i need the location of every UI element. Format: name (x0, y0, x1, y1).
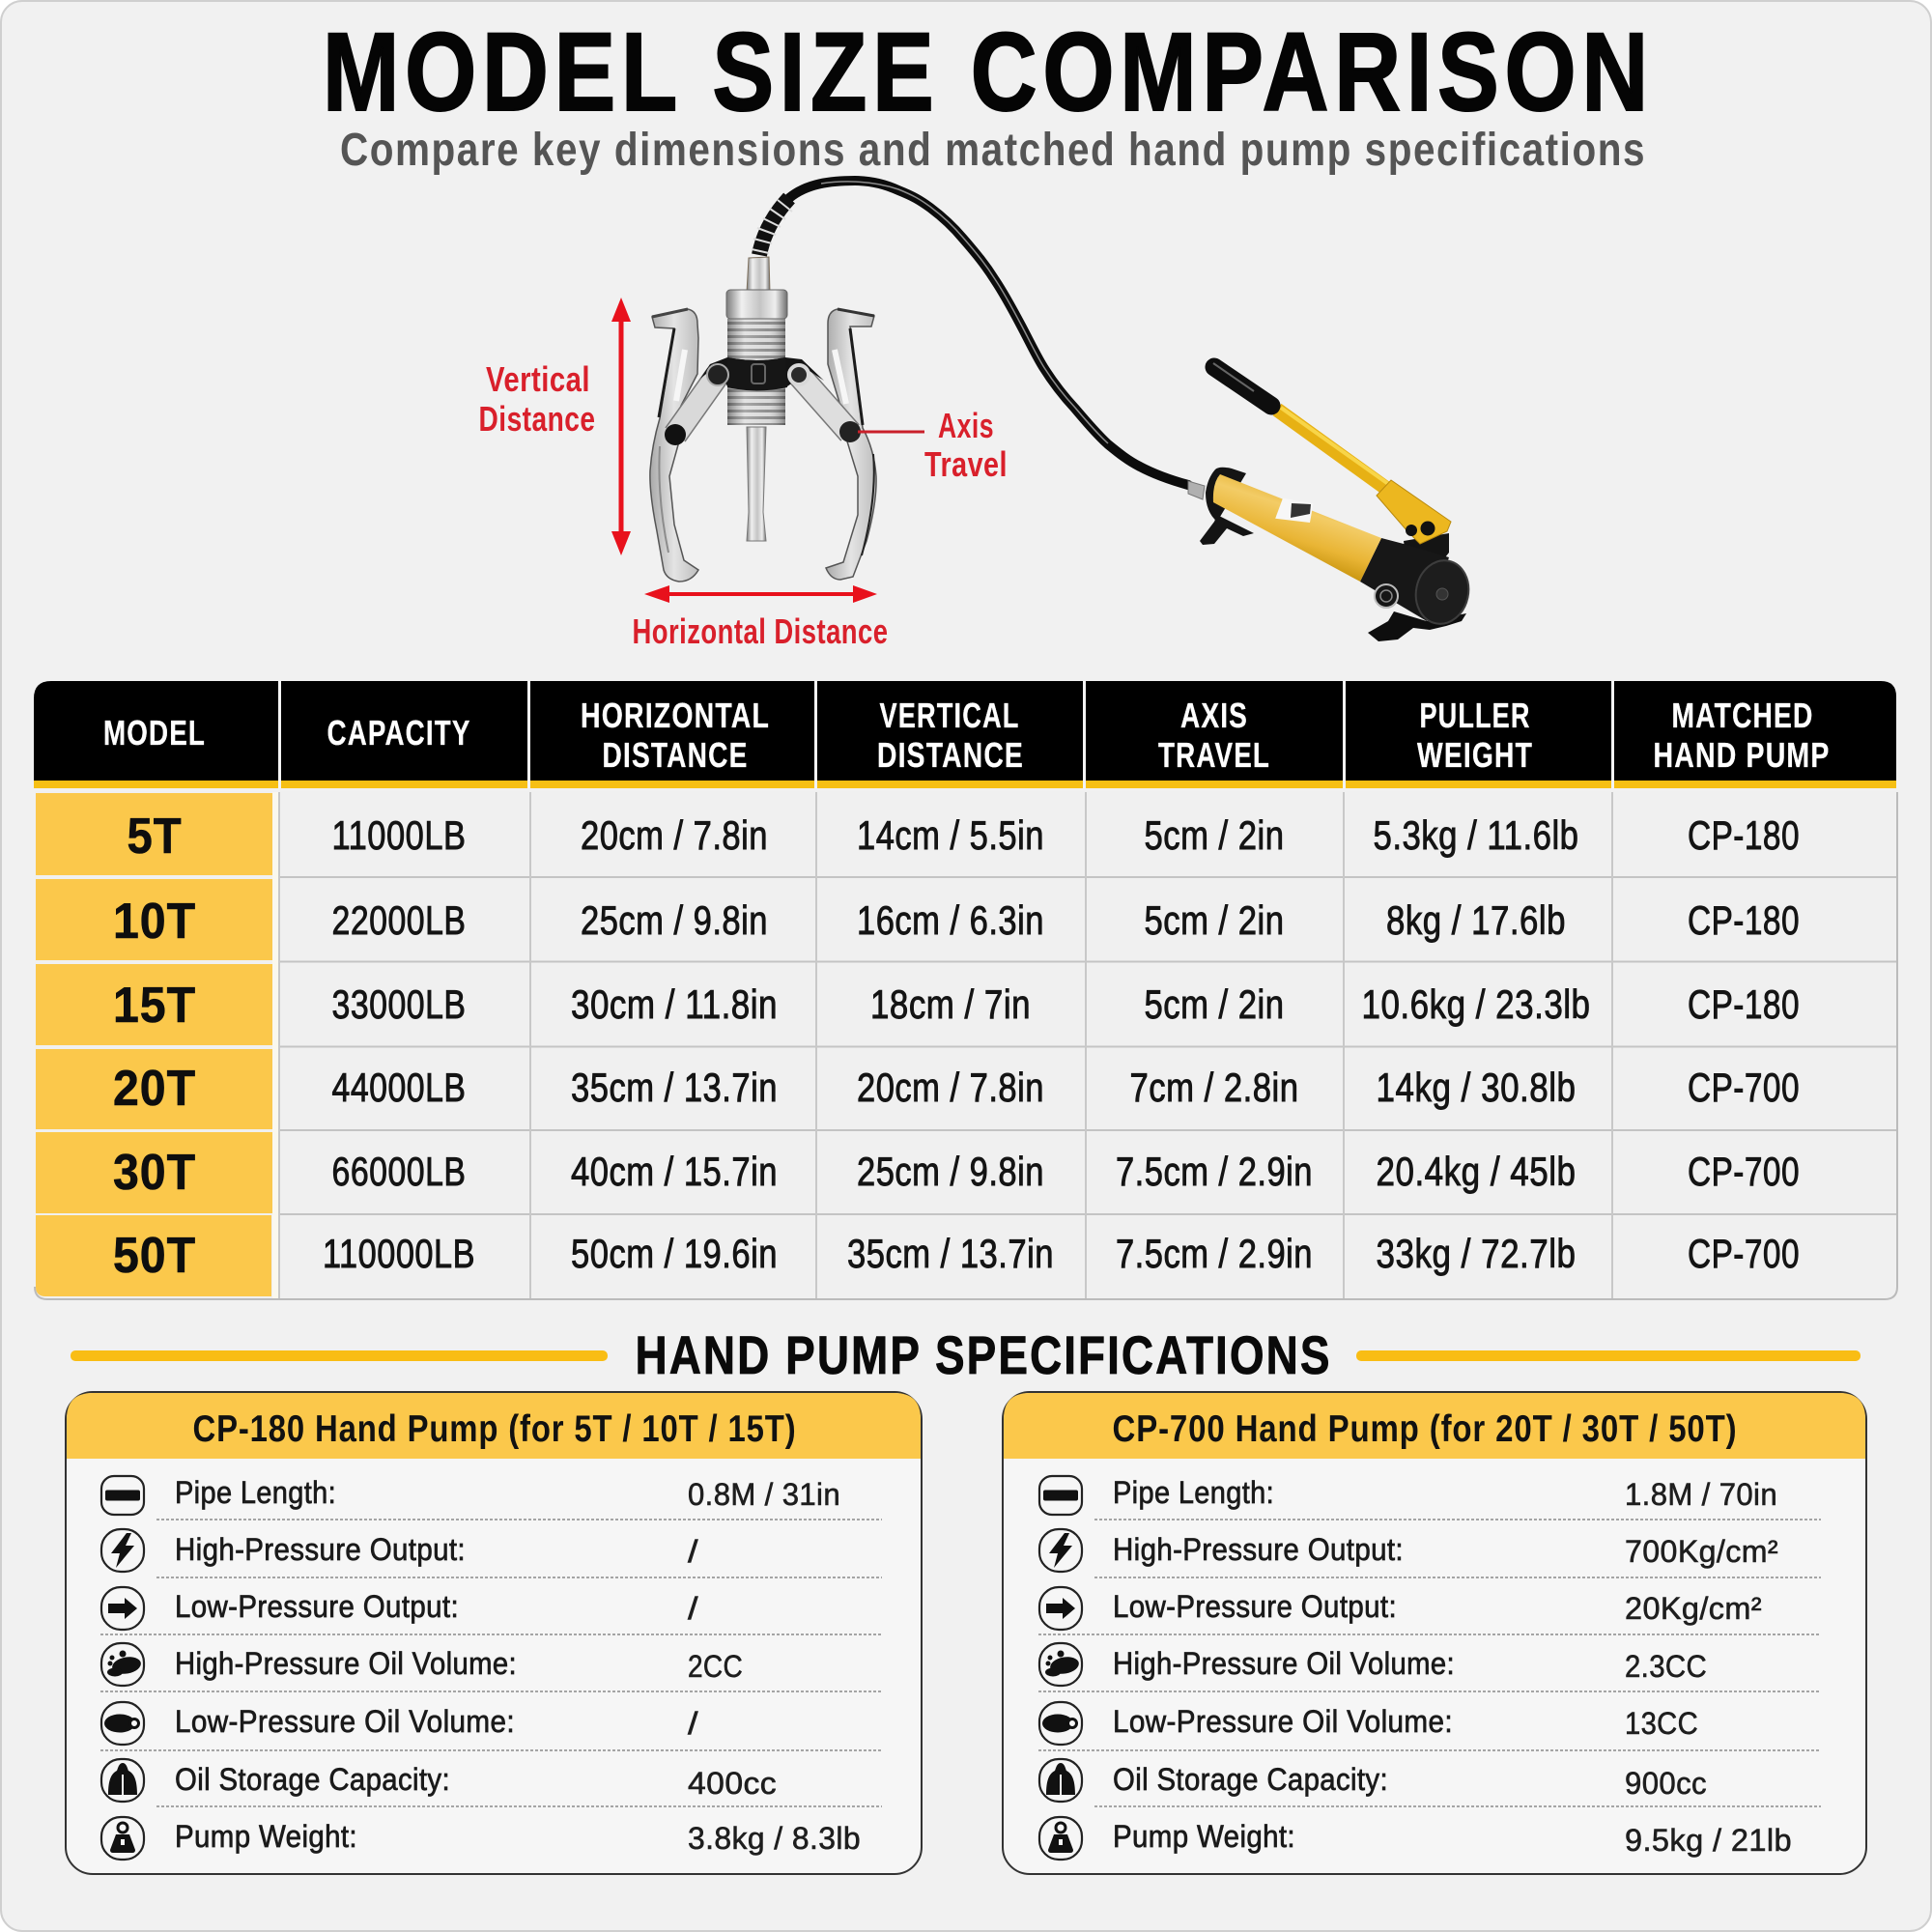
row: high-pressure output: 700Kg/cm² (1625, 1534, 1778, 1569)
row: 20T: 44000LB (332, 1065, 466, 1110)
subtitle: Compare key dimensions and matched hand pump specifications (340, 125, 1646, 176)
row: pump weight (101, 1817, 861, 1860)
row: high-pressure output (1039, 1529, 1778, 1572)
icon: lightning bolt (101, 1529, 144, 1572)
row: 20T: 20cm / 7.8in (857, 1065, 1044, 1110)
row: 30T: 66000LB (332, 1149, 466, 1194)
row: 50T: 7.5cm / 2.9in (1116, 1231, 1313, 1276)
row: low-pressure output (1039, 1587, 1762, 1630)
table header: HORIZONTAL (581, 696, 770, 735)
row: 20T: 14kg / 30.8lb (1376, 1065, 1577, 1110)
right link bar (799, 375, 850, 433)
section heading: hand pump specifications: HAND PUMP SPECIFICATIONS (636, 1324, 1331, 1385)
row: 10T: 22000LB (332, 897, 466, 943)
row: low-pressure oil volume: / (688, 1706, 698, 1741)
arrow: vertical distance (611, 298, 631, 555)
row: 15T (36, 964, 1800, 1045)
label: vertical distance: Vertical (486, 359, 590, 399)
label: vertical distance: Distance (479, 399, 595, 439)
icon: high-pressure oil (101, 1643, 144, 1686)
row: high-pressure oil volume: High-Pressure Oil Volume: (175, 1646, 517, 1681)
icon: weight (101, 1817, 144, 1860)
row: 10T: 16cm / 6.3in (857, 897, 1044, 943)
row: 5T (36, 793, 1800, 875)
row: 5T: 5.3kg / 11.6lb (1374, 812, 1578, 858)
row: high-pressure output (101, 1529, 698, 1572)
icon: arrow (101, 1587, 144, 1630)
table header: MATCHED (1671, 696, 1814, 735)
cylinder head (726, 290, 787, 319)
row: 10T: 5cm / 2in (1144, 897, 1285, 943)
row: high-pressure oil volume: High-Pressure Oil Volume: (1113, 1646, 1455, 1681)
hydraulic hose (747, 181, 1188, 485)
row: high-pressure oil volume: 2.3CC (1625, 1649, 1707, 1684)
icon: oil storage (1039, 1759, 1082, 1802)
panel: CP-700 hand pump (1003, 1392, 1866, 1874)
row: high-pressure output: / (688, 1534, 698, 1569)
comparison table (34, 681, 1897, 1299)
arrow: horizontal distance (644, 585, 877, 603)
table header: PULLER (1420, 696, 1530, 735)
row: pump weight: 3.8kg / 8.3lb (688, 1821, 861, 1856)
black collar (700, 357, 824, 390)
row: 15T: 33000LB (332, 981, 466, 1027)
row: high-pressure oil volume: 2CC (688, 1649, 743, 1684)
table header: DISTANCE (877, 735, 1024, 775)
product illustration: puller, hose and hand pump (479, 181, 1474, 651)
row: 15T: 18cm / 7in (870, 981, 1031, 1027)
row: 5T: 11000LB (332, 812, 466, 858)
panel header (1004, 1393, 1865, 1459)
row: 15T: 30cm / 11.8in (571, 981, 778, 1027)
hose connector (1188, 481, 1205, 499)
row: low-pressure oil volume (1039, 1702, 1698, 1745)
row: pipe length: 0.8M / 31in (688, 1477, 840, 1512)
row: pipe length (1039, 1475, 1777, 1515)
row: pump weight: Pump Weight: (175, 1819, 357, 1854)
section heading: hand pump specifications (71, 1324, 1861, 1385)
right arm (826, 309, 876, 580)
row: 50T (36, 1215, 1800, 1296)
row: 5T: 20cm / 7.8in (581, 812, 768, 858)
row: 20T (36, 1049, 1800, 1129)
row: pump weight: Pump Weight: (1113, 1819, 1295, 1854)
row: 10T: 10T (113, 894, 196, 950)
row: 15T: CP-180 (1688, 981, 1800, 1027)
row: low-pressure output (101, 1587, 698, 1630)
row: high-pressure output: High-Pressure Output: (175, 1532, 466, 1567)
label: axis travel with leader line: Travel (924, 444, 1008, 484)
row: 15T: 15T (113, 978, 196, 1034)
row: pipe length: 1.8M / 70in (1625, 1477, 1777, 1512)
row: 10T: 8kg / 17.6lb (1386, 897, 1566, 943)
row: pump weight (1039, 1817, 1792, 1860)
icon: pipe (1039, 1476, 1082, 1515)
row: pipe length: Pipe Length: (1113, 1475, 1274, 1510)
row: low-pressure output: Low-Pressure Output: (1113, 1589, 1397, 1624)
rear foot (1200, 515, 1254, 545)
puller (650, 290, 876, 582)
row: 5T: 5cm / 2in (1144, 812, 1285, 858)
centre rod (747, 427, 766, 541)
title: MODEL SIZE COMPARISON (323, 11, 1654, 134)
row: oil storage capacity (101, 1759, 777, 1802)
yellow cylinder (1206, 468, 1381, 582)
row: 50T: 50T (113, 1228, 196, 1284)
row: 20T: 35cm / 13.7in (571, 1065, 778, 1110)
table header: VERTICAL (879, 696, 1020, 735)
row: high-pressure oil volume (101, 1643, 743, 1686)
row: 30T: 7.5cm / 2.9in (1116, 1149, 1313, 1194)
row: 5T: 14cm / 5.5in (857, 812, 1044, 858)
row: 10T (36, 879, 1800, 960)
icon: low-pressure oil (1039, 1702, 1082, 1745)
table header (34, 681, 1896, 788)
row: oil storage capacity: Oil Storage Capacity: (1113, 1762, 1388, 1797)
panel header: CP-700 Hand Pump (for 20T / 30T / 50T) (1113, 1408, 1737, 1450)
table header: TRAVEL (1158, 735, 1270, 775)
table header: HAND PUMP (1654, 735, 1830, 775)
row: 50T: 33kg / 72.7lb (1376, 1231, 1577, 1276)
left link bar (675, 375, 718, 435)
row: oil storage capacity: 900cc (1625, 1766, 1707, 1801)
row: low-pressure output: 20Kg/cm² (1625, 1591, 1762, 1626)
row: 30T (36, 1132, 1800, 1213)
table body background and grid (35, 791, 1897, 1299)
row: 20T: CP-700 (1688, 1065, 1800, 1110)
row: 50T: 35cm / 13.7in (847, 1231, 1054, 1276)
row: 20T: 20T (113, 1061, 196, 1117)
table header: MODEL (103, 713, 206, 753)
row: 30T: 25cm / 9.8in (857, 1149, 1044, 1194)
panel header: CP-180 Hand Pump (for 5T / 10T / 15T) (193, 1408, 796, 1450)
row: oil storage capacity (1039, 1759, 1707, 1802)
row: oil storage capacity: 400cc (688, 1766, 777, 1801)
hand pump (1188, 363, 1474, 641)
table header: AXIS (1180, 696, 1248, 735)
row: 30T: CP-700 (1688, 1149, 1800, 1194)
table header: DISTANCE (603, 735, 748, 775)
icon: oil storage (101, 1759, 144, 1802)
icon: lightning bolt (1039, 1529, 1082, 1572)
row: 50T: 110000LB (323, 1231, 475, 1276)
row: 30T: 20.4kg / 45lb (1376, 1149, 1577, 1194)
row: 5T: CP-180 (1688, 812, 1800, 858)
row: low-pressure output: Low-Pressure Output: (175, 1589, 459, 1624)
row: low-pressure oil volume: 13CC (1625, 1706, 1698, 1741)
row: 5T: 5T (128, 809, 182, 865)
row: 50T: CP-700 (1688, 1231, 1800, 1276)
icon: pipe (101, 1476, 144, 1515)
icon: high-pressure oil (1039, 1643, 1082, 1686)
label: horizontal distance: Horizontal Distance (632, 611, 889, 651)
icon: weight (1039, 1817, 1082, 1860)
threaded body (727, 319, 785, 425)
row: pipe length: Pipe Length: (175, 1475, 336, 1510)
row: low-pressure oil volume: Low-Pressure Oil Volume: (175, 1704, 515, 1739)
row: pipe length (101, 1475, 840, 1515)
row: low-pressure output: / (688, 1591, 698, 1626)
row: 10T: 25cm / 9.8in (581, 897, 768, 943)
row: 20T: 7cm / 2.8in (1130, 1065, 1298, 1110)
left arm (650, 309, 698, 582)
row: high-pressure oil volume (1039, 1643, 1707, 1686)
row: 50T: 50cm / 19.6in (571, 1231, 778, 1276)
row: low-pressure oil volume: Low-Pressure Oil Volume: (1113, 1704, 1453, 1739)
label: axis travel with leader line: Axis (938, 406, 994, 445)
handle bracket with pins (1377, 480, 1451, 562)
dotted row dividers (100, 1520, 882, 1806)
pivot pins (665, 364, 861, 445)
row: 30T: 30T (113, 1145, 196, 1201)
label: vertical distance (479, 359, 595, 439)
row: oil storage capacity: Oil Storage Capacity: (175, 1762, 450, 1797)
row: 30T: 40cm / 15.7in (571, 1149, 778, 1194)
panel header (67, 1393, 921, 1459)
icon: arrow (1039, 1587, 1082, 1630)
table header: WEIGHT (1417, 735, 1533, 775)
row: low-pressure oil volume (101, 1702, 698, 1745)
row: 15T: 5cm / 2in (1144, 981, 1285, 1027)
dotted row dividers (1038, 1520, 1821, 1806)
row: 15T: 10.6kg / 23.3lb (1362, 981, 1590, 1027)
panel: CP-180 hand pump (66, 1392, 922, 1874)
row: 10T: CP-180 (1688, 897, 1800, 943)
table header: CAPACITY (327, 713, 471, 753)
row: high-pressure output: High-Pressure Output: (1113, 1532, 1404, 1567)
black pump end (1360, 538, 1474, 641)
icon: low-pressure oil (101, 1702, 144, 1745)
label: axis travel with leader line (858, 406, 1008, 484)
row: pump weight: 9.5kg / 21lb (1625, 1823, 1792, 1858)
yellow handle (1213, 363, 1391, 490)
